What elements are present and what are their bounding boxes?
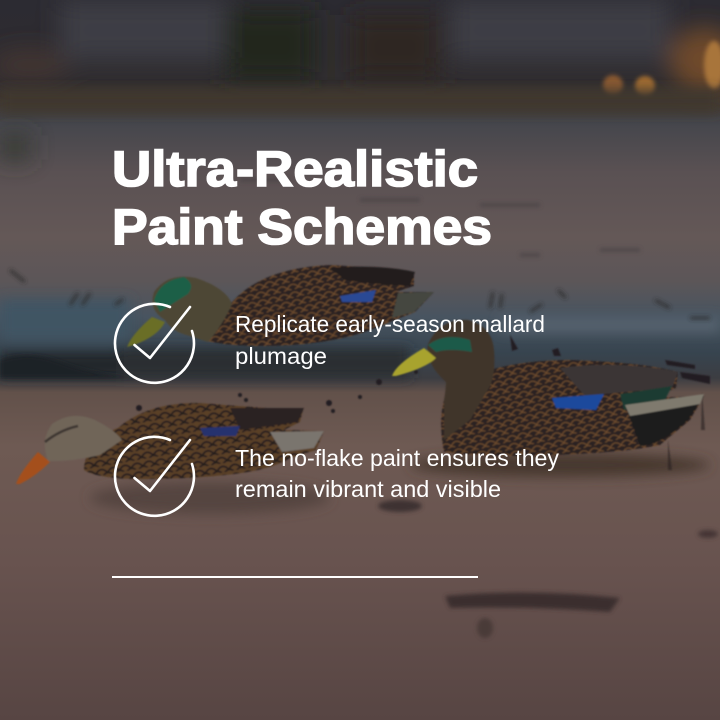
icon: check circle 2 bbox=[115, 437, 194, 516]
icon: check circle 1 bbox=[115, 304, 194, 383]
title bbox=[112, 141, 492, 255]
duck decoy: left hen bbox=[16, 403, 324, 484]
text: feature 2 bbox=[235, 445, 559, 502]
divider line bbox=[112, 576, 478, 578]
text: feature 1: Replicate early-season mallard bbox=[235, 311, 545, 337]
title: Paint Schemes bbox=[112, 199, 492, 255]
duck decoy: top drake bbox=[127, 265, 434, 347]
feature 1: mallard plumage bbox=[115, 304, 545, 383]
background bokeh lights bbox=[603, 41, 720, 96]
text: feature 1: plumage bbox=[235, 343, 327, 369]
text: feature 2: The no-flake paint ensures they bbox=[235, 445, 559, 471]
debris specks bbox=[136, 335, 710, 470]
text: feature 2: remain vibrant and visible bbox=[235, 476, 501, 502]
duck decoy: right drake bbox=[392, 320, 704, 456]
title: Ultra-Realistic bbox=[112, 141, 478, 197]
text: feature 1 bbox=[235, 311, 545, 369]
feature 2: no-flake paint bbox=[115, 437, 559, 516]
